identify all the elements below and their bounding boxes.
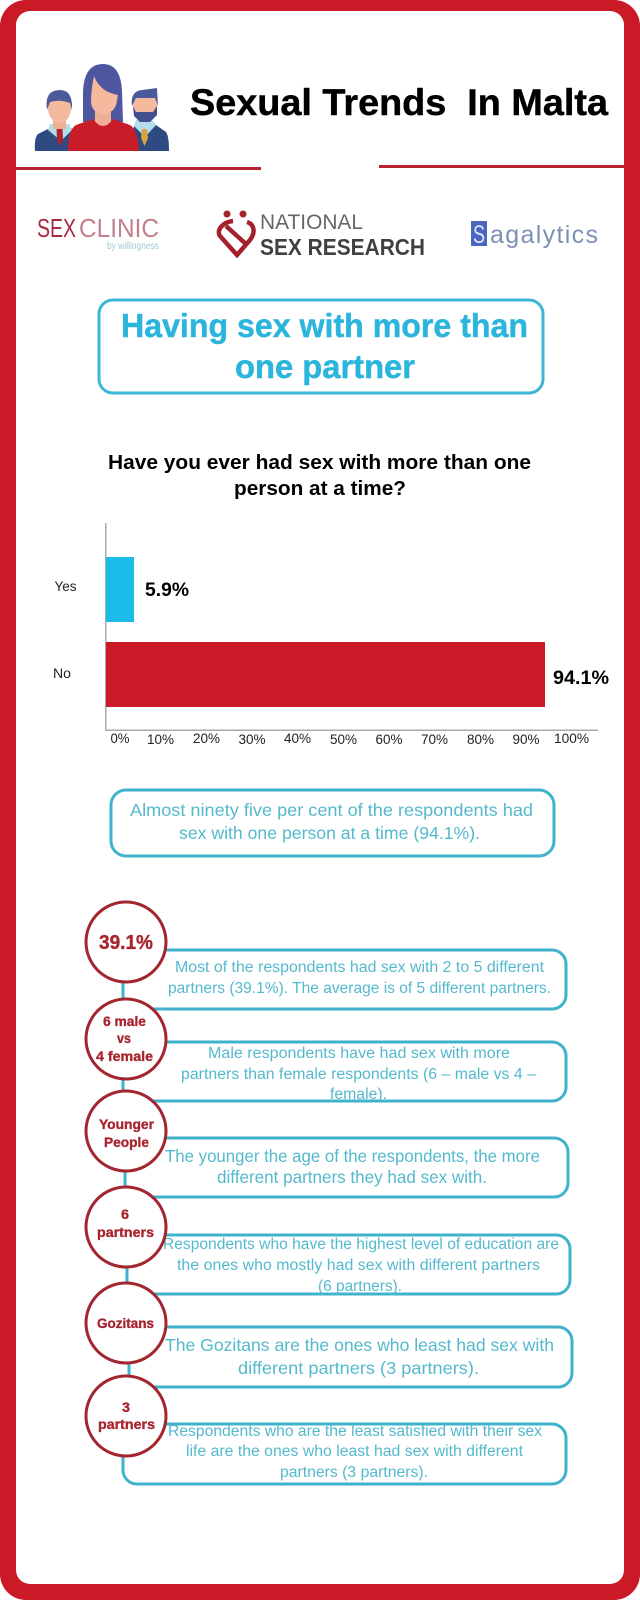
value: 5.9%: 5.9% [145,580,189,601]
finding box 2 [123,1042,566,1103]
x axis labels: 70% [421,731,448,747]
callout: Almost ninety five per cent of the respondents had [130,800,533,820]
logo: Sagalytics: agalytics [490,221,598,249]
finding box 4 [127,1235,570,1295]
finding box 1: partners (39.1%). The average is of 5 different partners. [168,980,551,997]
circle: 6 partners: 6 [121,1206,129,1222]
x axis labels: 40% [284,730,311,746]
finding box 1: Most of the respondents had sex with 2 to 5 different [175,959,545,976]
finding box 2: Male respondents have had sex with more [208,1045,510,1062]
circle: 6 partners: partners [97,1224,154,1240]
x axis labels: 80% [467,731,494,747]
logo: Sex Clinic [37,213,159,252]
title: Sexual Trends In Malta [190,82,608,123]
x axis labels: 0% [110,730,130,746]
x axis labels: 10% [147,731,174,747]
finding box 1 [123,950,566,1009]
finding box 6 [123,1423,566,1484]
circle: 6 male vs 4 female: vs [117,1030,131,1046]
finding box 4: (6 partners). [318,1278,402,1295]
bar: no [106,642,545,707]
finding box 5 [129,1327,572,1387]
circle: Younger People: People [104,1134,149,1150]
header divider right [379,165,624,168]
finding box 3: different partners they had sex with. [217,1167,487,1187]
circle: Gozitans [86,1283,166,1363]
x axis labels: 60% [376,731,402,747]
heading box: Having sex with more than [121,307,528,344]
finding box 3 [125,1138,568,1197]
circle: 3 partners: 3 [122,1399,130,1415]
chart question: Have you ever had sex with more than one [108,452,531,474]
icon: left man [35,90,76,151]
x axis labels: 90% [512,731,540,747]
circle: Younger People: Younger [99,1116,155,1132]
icon: three people [35,64,169,151]
value: 94.1%: 94.1% [553,668,609,689]
finding box 6: life are the ones who least had sex with different [186,1443,524,1460]
icon: right man [130,88,169,151]
finding box 6: Respondents who are the least satisfied with their sex [168,1423,542,1440]
header divider left [16,167,261,170]
icon: woman [68,64,139,151]
x axis labels: 30% [238,731,266,747]
circle: Gozitans: Gozitans [97,1315,154,1331]
x axis labels [110,730,589,747]
logo: Sex Clinic: SEX [37,213,76,243]
logo: Sex Clinic: CLINIC [79,213,159,243]
chart question: person at a time? [234,478,406,500]
finding box 2: partners than female respondents (6 – male vs 4 – [181,1066,536,1083]
finding box 4: Respondents who have the highest level of education are [163,1236,559,1253]
logo: National Sex Research: NATIONAL [260,211,363,234]
icon: heart [219,210,254,255]
callout: sex with one person at a time (94.1%). [179,823,480,843]
circle: 39.1%: 39.1% [99,932,153,954]
heading box [99,300,543,393]
callout [111,790,554,856]
finding box 3: The younger the age of the respondents, the more [165,1146,540,1166]
chart question [108,452,531,500]
circle: 6 male vs 4 female [86,999,166,1079]
logo: Sagalytics: S [473,221,485,249]
label: no: No [53,665,71,681]
logo: Sex Clinic: by willingness [107,241,159,252]
finding box 4: the ones who mostly had sex with different partners [177,1257,540,1274]
circle: 3 partners [86,1376,166,1456]
circle: 6 male vs 4 female: 4 female [96,1048,153,1064]
bar chart [53,523,609,747]
logo: National Sex Research [219,210,425,260]
logo: National Sex Research: SEX RESEARCH [260,234,425,260]
x axis labels: 20% [193,730,220,746]
circle: 6 partners [86,1187,166,1267]
label: yes: Yes [54,578,76,594]
heading box: one partner [235,348,415,385]
circle: Younger People [86,1091,166,1171]
x axis labels: 100% [554,730,589,746]
finding box 6: partners (3 partners). [280,1464,428,1481]
finding box 2: female). [330,1086,387,1103]
finding box 5: different partners (3 partners). [238,1358,479,1378]
finding box 5: The Gozitans are the ones who least had sex with [165,1335,554,1355]
x axis labels: 50% [330,731,357,747]
circle: 3 partners: partners [98,1416,155,1432]
circle: 39.1% [86,902,166,982]
circle: 6 male vs 4 female: 6 male [103,1013,146,1029]
bar: yes [106,557,134,622]
